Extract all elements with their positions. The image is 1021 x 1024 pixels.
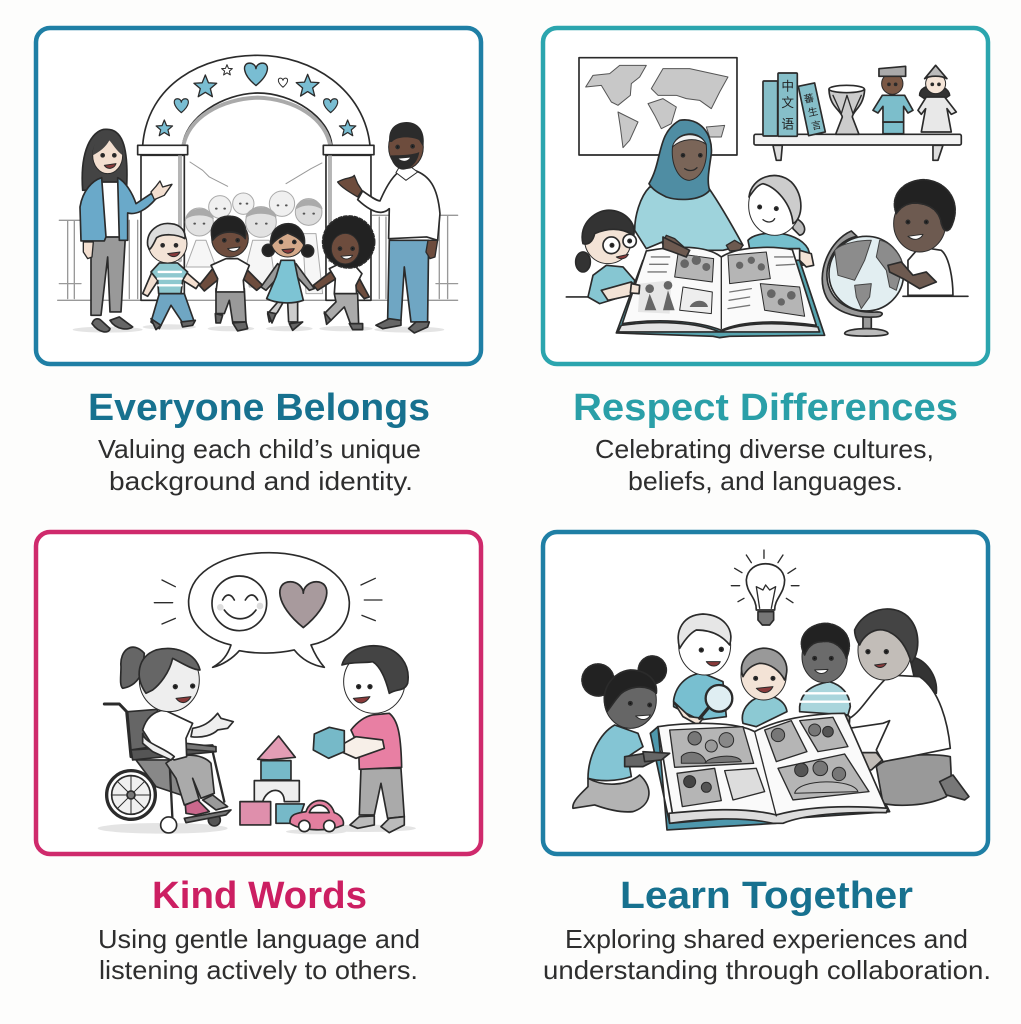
child: magnifier [674,614,732,725]
man teacher [338,122,440,333]
books: 中 [781,79,794,93]
doll: boy [873,66,913,134]
illustration: children exploring a book [573,550,969,830]
pointing hand [643,752,670,762]
text block: respect differences description: beliefs, and languages. [628,466,903,496]
woman teacher [80,129,172,332]
panel: kind words [36,532,481,854]
text block: kind words description: listening actively to others. [99,955,418,985]
books: 蕃 [803,92,815,106]
drum [829,85,865,134]
boy's arm on globe [888,262,936,289]
books: 言 [810,118,822,133]
open photo book [650,713,890,830]
table line [566,294,968,299]
background children [185,191,323,294]
child: white shirt, dark skin [199,216,263,331]
text block: everyone belongs description: background and identity. [109,466,413,496]
panel frame: everyone belongs [36,28,481,364]
text block: learn together description [543,924,991,985]
text block: respect differences description: Celebrating diverse cultures, [595,434,934,464]
panel frame: kind words [36,532,481,854]
heading: Respect Differences: Respect Differences [573,387,958,429]
books [763,73,825,136]
child: curly hair [313,216,375,330]
books: 生 [807,105,819,119]
books: 文 [781,96,794,110]
heading: Everyone Belongs: Everyone Belongs [88,387,430,429]
panel: respect differences [543,28,988,364]
text block: learn together description: Exploring shared experiences and [565,924,968,954]
light bulb [731,550,799,625]
panel frame: learn together [543,532,988,854]
ground shadows [73,324,444,333]
illustration: world cultures reading [566,58,968,338]
toy car [290,801,343,832]
speech bubble [154,553,382,667]
girl with glasses [576,210,640,304]
child: middle [741,648,787,727]
text block: kind words description [98,924,420,985]
boy with pink shirt [313,646,408,833]
illustration: kind conversation [98,553,416,834]
boy with globe [894,180,955,295]
block tower [240,736,304,825]
illustration: children and teachers under an arch [58,55,458,333]
teacher [821,609,969,805]
globe [822,231,904,336]
panel: everyone belongs [36,28,481,364]
heading: Learn Together: Learn Together [620,875,913,917]
text block: respect differences description [595,434,934,496]
child: striped shirt [143,223,199,330]
girl with ponytail [748,175,814,267]
girl in wheelchair [104,647,233,833]
books: 语 [781,118,794,132]
heading: Kind Words: Kind Words [152,875,367,917]
arch [138,55,374,300]
arch decorations: stars and hearts [156,63,356,136]
panel frame: respect differences [543,28,988,364]
fence [58,215,458,300]
text block: everyone belongs description: Valuing each child’s unique [98,434,421,464]
teacher in hijab [635,120,743,257]
doll: girl [918,65,956,132]
text block: learn together description: understanding through collaboration. [543,955,991,985]
open book [616,237,825,338]
world map [579,58,737,155]
girl with puffs [573,656,670,812]
text block: kind words description: Using gentle language and [98,924,420,954]
child: teal dress [261,224,314,330]
heart [280,582,327,628]
child: curly hair [800,623,850,715]
panel: learn together [543,532,988,854]
smiley [212,576,267,631]
text block: everyone belongs description [98,434,421,496]
ground shadows [98,823,416,834]
shelf [754,134,961,160]
